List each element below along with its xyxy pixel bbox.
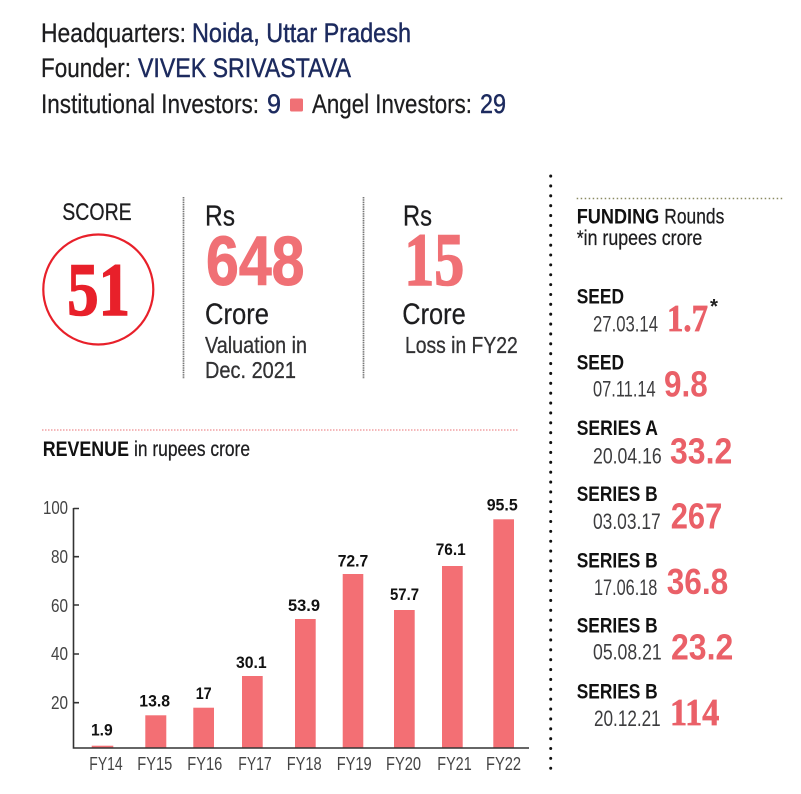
stat: loss: 15 <box>404 219 464 302</box>
round: series B 17.06.18: 17.06.18 <box>594 575 657 600</box>
round: series B 20.12.21 <box>577 680 719 734</box>
value labels: 17 <box>196 684 212 703</box>
round: seed 27.03.14: SEED <box>577 285 624 308</box>
header: company facts: Founder: <box>41 53 131 83</box>
heading: funding rounds <box>577 205 724 250</box>
round: seed 27.03.14: 1.7 <box>667 298 708 340</box>
round: series A 20.04.16: SERIES A <box>577 417 658 440</box>
value labels: 57.7 <box>390 585 419 604</box>
header: company facts: VIVEK SRIVASTAVA <box>138 53 351 83</box>
round: series B 17.06.18: SERIES B <box>577 549 658 572</box>
bar chart: revenue by fiscal year <box>43 496 529 774</box>
value labels: 13.8 <box>139 692 170 710</box>
value labels: 1.9 <box>91 720 113 740</box>
stat: loss: Loss in FY22 <box>405 332 518 358</box>
heading: revenue: in rupees crore <box>134 438 250 461</box>
value labels: 53.9 <box>288 596 320 615</box>
x axis labels: FY14 <box>89 754 123 774</box>
y axis labels <box>43 497 68 713</box>
x axis labels: FY16 <box>187 754 222 774</box>
round: seed 27.03.14: 27.03.14 <box>593 312 658 337</box>
stat: loss: Crore <box>402 298 466 331</box>
value labels: 72.7 <box>338 552 368 570</box>
heading: funding rounds: Rounds <box>664 205 724 228</box>
round: series B 20.12.21: 20.12.21 <box>594 706 661 731</box>
x axis labels: FY17 <box>238 754 272 774</box>
axes <box>74 508 529 748</box>
heading: funding rounds: FUNDING <box>577 205 659 228</box>
heading: funding rounds: *in rupees crore <box>577 227 702 250</box>
header: company facts: Headquarters: <box>41 18 186 48</box>
funding list <box>577 285 733 734</box>
round: series A 20.04.16: 20.04.16 <box>593 443 662 468</box>
round: series B 03.03.17: 03.03.17 <box>593 509 661 534</box>
header: company facts: 9 <box>267 89 281 119</box>
value labels <box>91 496 518 740</box>
stat: valuation: Rs <box>205 200 235 232</box>
round: series B 17.06.18: 36.8 <box>667 561 728 602</box>
round: series B 05.08.21 <box>577 615 733 667</box>
round: seed 07.11.14: 9.8 <box>664 364 708 405</box>
round: series A 20.04.16: 33.2 <box>670 430 732 471</box>
value labels: 76.1 <box>436 540 466 559</box>
round: series B 05.08.21: SERIES B <box>577 615 658 638</box>
round: seed 27.03.14: * <box>710 296 718 318</box>
header: company facts: Noida, Uttar Pradesh <box>192 18 411 48</box>
x axis labels <box>89 754 521 774</box>
x axis labels: FY20 <box>386 754 421 774</box>
header: company facts: 29 <box>480 89 506 119</box>
x axis labels: FY22 <box>486 754 521 774</box>
stat: valuation: Valuation in <box>205 332 307 358</box>
score badge: 51 <box>67 249 130 332</box>
y axis labels: 20 <box>51 692 68 713</box>
round: seed 07.11.14: SEED <box>577 351 624 374</box>
round: series B 20.12.21: 114 <box>670 692 719 734</box>
y axis labels: 60 <box>51 595 68 616</box>
heading: revenue: REVENUE <box>43 438 129 461</box>
header: company facts: Angel Investors: <box>312 89 472 119</box>
round: series B 03.03.17: 267 <box>671 495 722 536</box>
bars <box>92 519 514 748</box>
value labels: 95.5 <box>487 496 518 514</box>
round: series B 05.08.21: 05.08.21 <box>593 639 662 664</box>
stat: loss: Rs <box>403 200 432 232</box>
round: series B 20.12.21: SERIES B <box>577 680 658 703</box>
round: seed 07.11.14 <box>577 351 708 405</box>
round: seed 07.11.14: 07.11.14 <box>593 377 656 402</box>
x axis labels: FY18 <box>287 754 322 774</box>
round: seed 27.03.14 <box>577 285 718 340</box>
stat: loss <box>402 200 518 358</box>
round: series B 03.03.17 <box>577 483 722 536</box>
stat: valuation: 648 <box>206 222 304 300</box>
stat: valuation: Crore <box>205 298 269 331</box>
x axis labels: FY19 <box>337 754 372 774</box>
round: series B 03.03.17: SERIES B <box>577 483 658 506</box>
header: company facts <box>41 18 506 119</box>
y axis labels: 80 <box>51 546 68 567</box>
x axis labels: FY21 <box>437 754 472 774</box>
round: series B 05.08.21: 23.2 <box>671 626 733 667</box>
value labels: 30.1 <box>236 653 267 672</box>
score badge: SCORE <box>62 199 132 226</box>
round: series A 20.04.16 <box>577 417 732 471</box>
heading: revenue <box>43 438 250 461</box>
x axis labels: FY15 <box>137 754 172 774</box>
y axis labels: 40 <box>51 643 68 664</box>
stat: valuation: Dec. 2021 <box>205 357 296 383</box>
y axis labels: 100 <box>43 497 68 518</box>
stat: valuation <box>205 200 307 383</box>
round: series B 17.06.18 <box>577 549 728 602</box>
header: company facts: Institutional Investors: <box>41 89 259 119</box>
score badge <box>43 199 153 344</box>
